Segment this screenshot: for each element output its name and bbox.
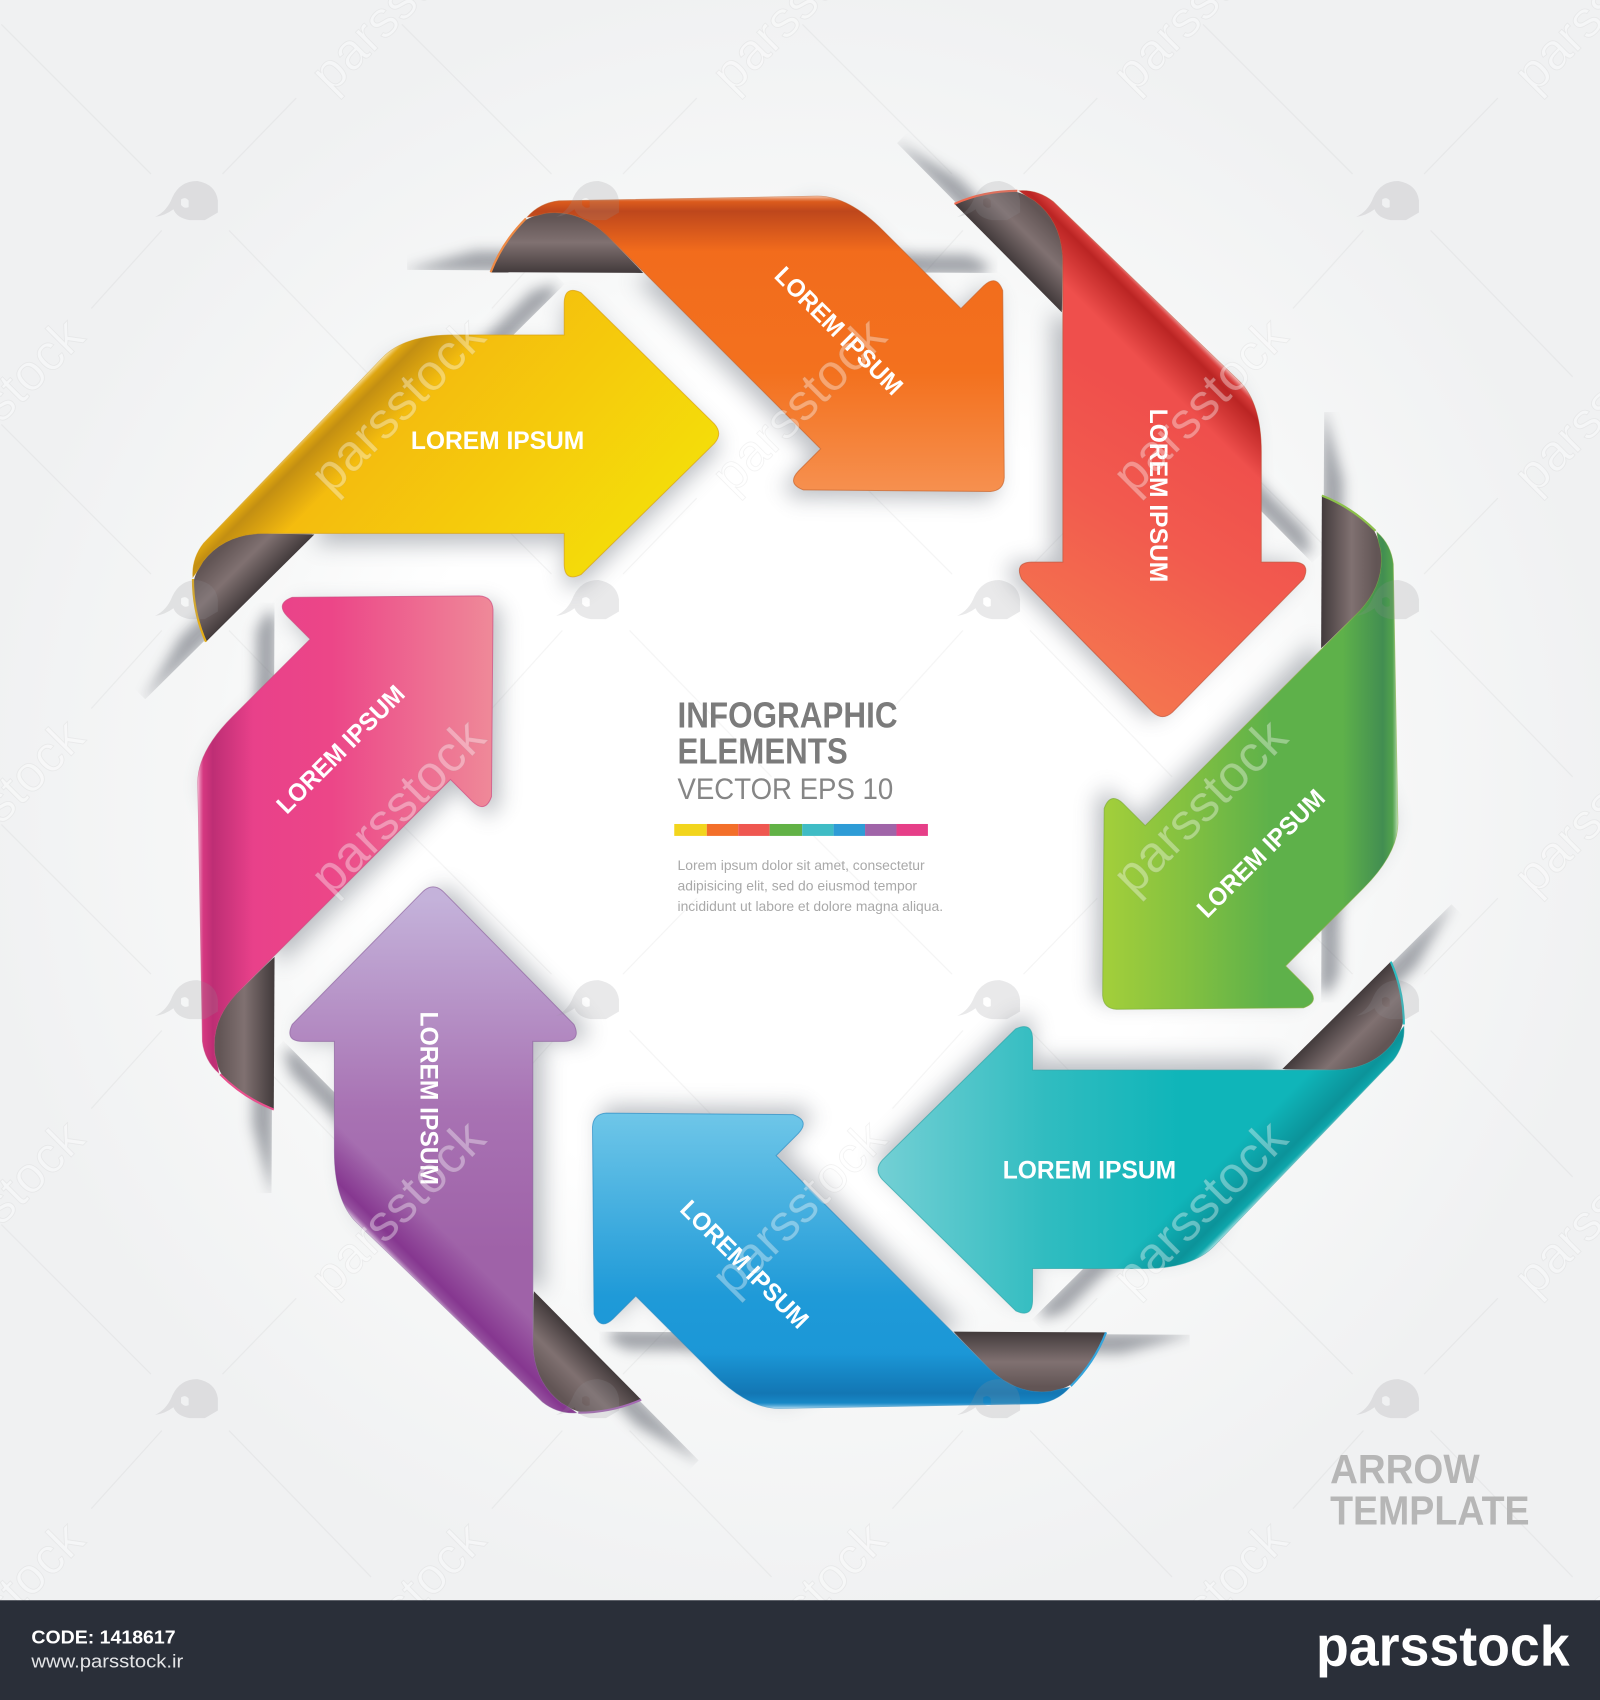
footer band [0,1600,1600,1700]
arrow: teal [878,962,1433,1313]
footer code and url: CODE: 1418617 [31,1627,176,1648]
center heading: INFOGRAPHIC [678,695,898,735]
watermark text: parsstock [1101,1108,1298,1306]
arrow: red [954,162,1306,717]
arrow labels: LOREM IPSUM [675,1195,814,1334]
rainbow bar [674,824,928,836]
footer code and url [30,1627,183,1671]
arrow labels: LOREM IPSUM [769,261,908,401]
arrow labels: LOREM IPSUM [415,1012,443,1185]
body text: Lorem ipsum dolor sit amet, consectetur [678,858,925,873]
body text: incididunt ut labore et dolore magna aliqua. [678,899,943,914]
arrow labels: LOREM IPSUM [411,427,584,455]
watermark text: parsstock [299,707,496,904]
body text: adipisicing elit, sed do eiusmod tempor [678,879,918,894]
footer code and url: www.parsstock.ir [30,1650,183,1671]
center heading: ELEMENTS [678,731,848,771]
center heading: VECTOR EPS 10 [678,774,893,806]
watermark text: parsstock [700,1108,897,1306]
arrow template caption: TEMPLATE [1330,1487,1530,1533]
arrow: blue [588,1094,1107,1411]
center heading [678,695,898,806]
watermark text: parsstock [299,306,496,503]
arrow labels: LOREM IPSUM [271,680,411,819]
watermark text: parsstock [1101,306,1298,503]
arrow: purple [290,887,641,1442]
body text [678,858,943,914]
arrow labels: LOREM IPSUM [1003,1157,1176,1185]
arrow: yellow [164,290,719,642]
arrow template caption: ARROW [1330,1446,1480,1492]
footer logo: parsstock [1316,1614,1570,1677]
arrow template caption [1330,1446,1530,1533]
watermark text: parsstock [1101,707,1298,904]
arrow labels: LOREM IPSUM [1191,784,1331,923]
arrow labels [271,261,1331,1334]
arrow: pink [195,592,513,1110]
watermark text: parsstock [700,306,897,503]
watermark text: parsstock [299,1108,496,1306]
arrow labels: LOREM IPSUM [1144,409,1172,582]
arrow: orange [490,194,1008,511]
arrow: green [1083,494,1400,1014]
watermark icons [155,181,1419,1418]
